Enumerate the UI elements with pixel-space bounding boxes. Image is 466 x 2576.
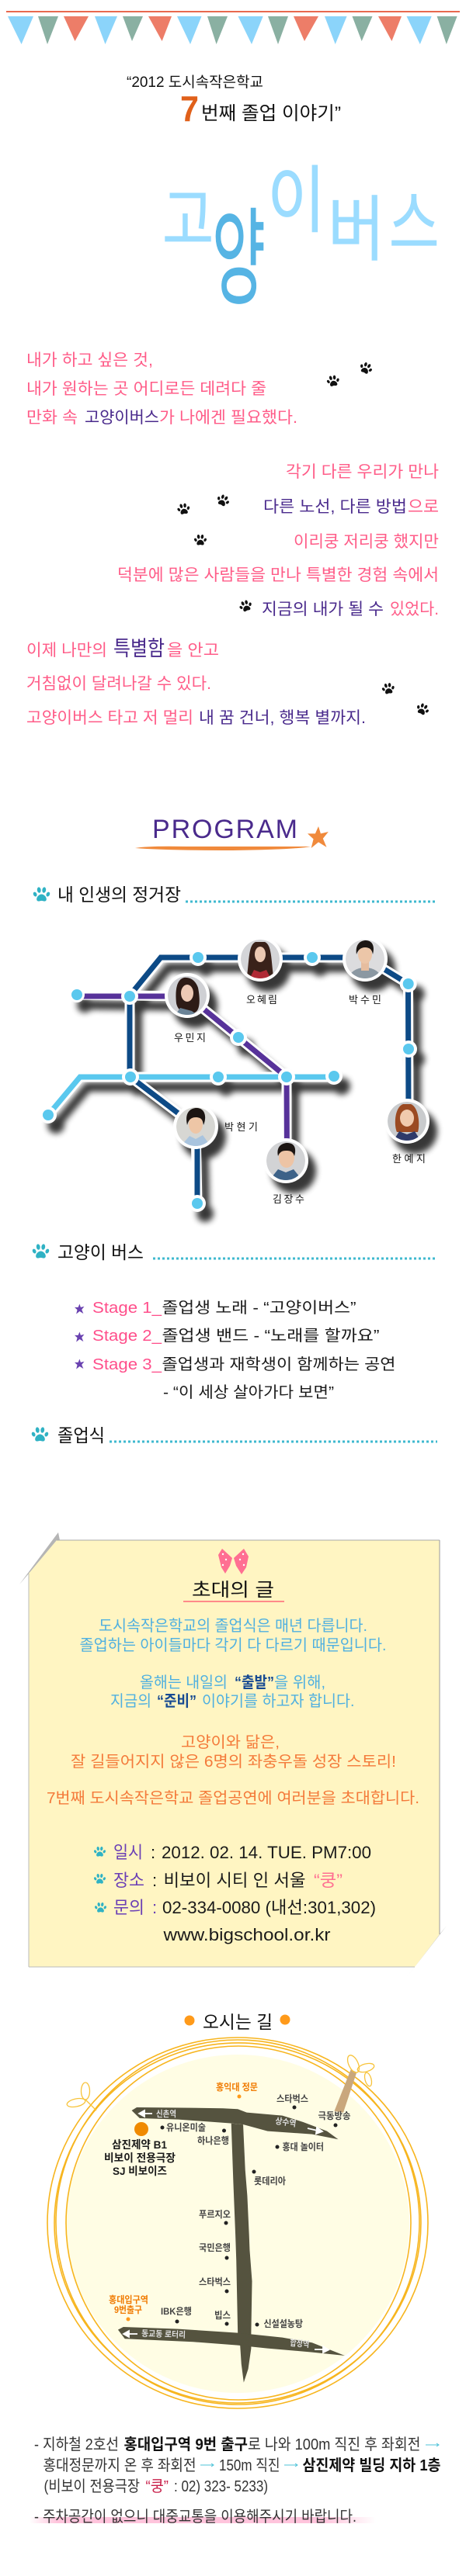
card message: blue: 올해는 내일의 (140, 1674, 228, 1691)
card message: blue (79, 1617, 387, 1710)
card message: blue: 도시속작은학교의 졸업식은 매년 다릅니다. (99, 1617, 367, 1635)
section heading: 고양이 버스: 고양이 버스 (57, 1242, 144, 1262)
section heading: 졸업식 (31, 1425, 437, 1446)
icon: pink bow (218, 1549, 249, 1574)
landmark labels: 스타벅스 (276, 2093, 308, 2104)
event details: 비보이 시티 인 서울 (163, 1871, 306, 1890)
stage list: Stage 2_ (92, 1328, 162, 1345)
directions text: 150m 직진 (219, 2457, 280, 2474)
stage list: Stage 1_ (92, 1300, 162, 1317)
intro text: second stanza: 덕분에 많은 사람들을 만나 특별한 경험 속에서 (117, 566, 439, 584)
stage list: Stage 3_ (92, 1356, 162, 1373)
intro text: third stanza: 거침없이 달려나갈 수 있다. (26, 675, 211, 693)
landmark labels: 비보이 전용극장 (104, 2152, 176, 2164)
landmark labels: 홍대입구역 (109, 2294, 148, 2305)
intro text: first stanza: 내가 하고 싶은 것, (26, 351, 153, 369)
intro text: first stanza: 내가 원하는 곳 어디로든 데려다 줄 (26, 380, 266, 398)
landmark labels: 9번출구 (114, 2304, 142, 2315)
intro text: second stanza: 이리쿵 저리쿵 했지만 (294, 533, 439, 551)
intro text: second stanza: 지금의 내가 될 수 (262, 601, 384, 618)
landmark labels: 유니온미술 (166, 2122, 206, 2133)
intro text: third stanza: 을 안고 (167, 642, 219, 660)
stage list: 졸업생과 재학생이 함께하는 공연 (162, 1356, 396, 1373)
stage list: - “이 세상 살아가다 보면” (163, 1383, 334, 1401)
stage list (75, 1299, 396, 1401)
landmark labels: 롯데리아 (254, 2176, 286, 2186)
directions text (30, 2436, 441, 2526)
landmark labels: 푸르지오 (199, 2209, 231, 2220)
landmark labels: 하나은행 (197, 2135, 229, 2146)
intro text: third stanza: 내 꿈 건너, 행복 별까지. (199, 709, 366, 727)
intro text: second stanza: 다른 노선, 다른 방법 (263, 498, 407, 516)
icons: black paw prints (176, 360, 431, 717)
intro text: first stanza: 만화 속 (26, 409, 78, 427)
section heading: 내 인생의 정거장 (33, 885, 437, 905)
landmark labels: 홍익대 정문 (216, 2081, 258, 2093)
directions text: 홍대정문까지 온 후 좌회전 (43, 2457, 196, 2474)
bunting string (6, 11, 460, 12)
card message: blue: 을 위해, (274, 1674, 325, 1691)
section heading: 졸업식: 졸업식 (57, 1425, 105, 1446)
card title: 초대의 글 (192, 1580, 274, 1601)
location map (42, 2031, 433, 2415)
subtitle: 7 (180, 88, 199, 129)
intro text: third stanza: 고양이버스 타고 저 멀리 (26, 709, 193, 727)
title: 고양이버스: 스 (389, 185, 439, 264)
heading: 오시는 길 (185, 2012, 290, 2032)
name labels: 우민지 (174, 1032, 206, 1044)
landmark labels: 스타벅스 (199, 2277, 231, 2287)
card message: orange: 7번째 도시속작은학교 졸업공연에 여러분을 초대합니다. (47, 1789, 419, 1807)
card message: orange: 잘 길들어지지 않은 6명의 좌충우돌 성장 스토리! (71, 1753, 396, 1771)
event details: 2012. 02. 14. TUE. PM7:00 (162, 1843, 371, 1862)
card message: blue: 이야기를 하고자 합니다. (202, 1692, 354, 1710)
title: 고양이버스: 양 (212, 200, 266, 319)
road names: 상수역 (275, 2116, 297, 2129)
landmark labels (104, 2081, 351, 2329)
card message: blue: “출발” (235, 1674, 274, 1691)
card message: blue: 지금의 (110, 1692, 151, 1710)
title: 고양이버스 (162, 160, 439, 319)
clothespin and loops (66, 2054, 375, 2113)
road arrows (123, 2110, 329, 2353)
directions text: 삼진제약 빌딩 지하 1층 (303, 2457, 441, 2474)
intro text: second stanza (117, 463, 439, 618)
section heading: 고양이 버스 (32, 1242, 437, 1262)
intro text: second stanza: 각기 다른 우리가 만나 (286, 463, 439, 481)
name labels: 오혜림 (246, 994, 277, 1006)
directions text: 로 나와 100m 직진 후 좌회전 (248, 2436, 421, 2453)
directions text: “쿵” (146, 2478, 169, 2495)
card message: blue: “준비” (157, 1692, 196, 1710)
portrait: 우민지 (168, 976, 207, 1016)
landmark labels: 삼진제약 B1 (112, 2138, 167, 2151)
event details: : (151, 1843, 155, 1862)
name labels: 박현기 (224, 1121, 258, 1133)
card title (183, 1580, 284, 1602)
portrait: 김장수 (266, 1141, 305, 1181)
subtitle (127, 74, 341, 129)
bunting flags (8, 16, 457, 44)
landmark dots (126, 2095, 337, 2326)
heading: PROGRAM: PROGRAM (152, 815, 297, 844)
portrait: 박수민 (346, 940, 384, 978)
subtitle: “2012 도시속작은학교 (127, 74, 263, 91)
intro text: third stanza: 특별함 (113, 637, 165, 660)
section heading: 내 인생의 정거장: 내 인생의 정거장 (57, 885, 181, 905)
road names (141, 2109, 310, 2349)
portrait: 박현기 (176, 1107, 215, 1147)
landmark labels: 신설설농탕 (264, 2318, 303, 2329)
roads (118, 2107, 345, 2383)
map lines and stations (40, 937, 429, 1212)
heading: 오시는 길: 오시는 길 (203, 2012, 273, 2032)
road names: 신촌역 (156, 2109, 176, 2119)
directions text: (비보이 전용극장 (43, 2477, 140, 2495)
portrait: 한예지 (388, 1102, 426, 1141)
intro text: second stanza: 으로 (408, 498, 439, 516)
intro text: first stanza: 가 나에겐 필요했다. (159, 409, 297, 427)
name labels: 한예지 (392, 1153, 426, 1165)
landmark labels: IBK은행 (161, 2305, 192, 2317)
name labels (174, 994, 426, 1205)
subway map (40, 937, 437, 1222)
road names: 동교동 로터리 (141, 2328, 186, 2340)
intro text: third stanza: 이제 나만의 (26, 642, 107, 660)
landmark labels: 국민은행 (199, 2242, 231, 2253)
event details (93, 1843, 376, 1944)
card message: orange (47, 1733, 419, 1807)
heading: PROGRAM (135, 815, 329, 850)
event details: “쿵” (314, 1871, 343, 1890)
card message: orange: 고양이와 닮은, (181, 1733, 280, 1751)
stage list: 졸업생 노래 - “고양이버스” (162, 1299, 356, 1317)
event details: : (152, 1898, 157, 1917)
intro text: first stanza (26, 351, 297, 427)
map background and rings (42, 2031, 433, 2415)
portrait: 오혜림 (241, 940, 280, 979)
name labels: 박수민 (349, 994, 381, 1006)
intro text: third stanza (26, 637, 366, 727)
title: 고양이버스: 버 (328, 191, 385, 270)
event details: 문의 (113, 1898, 144, 1917)
directions text: : 02) 323- 5233) (174, 2478, 268, 2495)
intro text: first stanza: 고양이버스 (85, 409, 159, 427)
landmark labels: 극동방송 (318, 2110, 351, 2121)
title: 고양이버스: 고 (162, 182, 214, 260)
directions text: 홍대입구역 9번 출구 (124, 2436, 248, 2453)
landmark labels: 홍대 놀이터 (283, 2141, 324, 2152)
road names: 합정역 (290, 2337, 310, 2349)
event details: 일시 (113, 1843, 143, 1862)
subtitle: 번째 졸업 이야기” (201, 103, 341, 124)
event details: 장소 (113, 1871, 144, 1890)
card message: blue: 졸업하는 아이들마다 각기 다 다르기 때문입니다. (79, 1636, 387, 1654)
invitation note card (19, 1532, 447, 1977)
event details: www.bigschool.or.kr (162, 1925, 331, 1944)
landmark labels: 빕스 (214, 2310, 231, 2321)
name labels: 김장수 (273, 1193, 304, 1205)
intro text: second stanza: 있었다. (390, 601, 439, 618)
directions text: - 주차공간이 없으니 대중교통을 이용해주시기 바랍니다. (34, 2508, 356, 2526)
map drop shadow (47, 947, 437, 1222)
stage list: 졸업생 밴드 - “노래를 할까요” (162, 1327, 379, 1345)
event details: : (152, 1871, 157, 1890)
event details: 02-334-0080 (내선:301,302) (162, 1898, 376, 1917)
directions text: - 지하철 2호선 (34, 2436, 119, 2453)
landmark labels: SJ 비보이즈 (113, 2165, 167, 2177)
title: 고양이버스: 이 (267, 160, 325, 241)
